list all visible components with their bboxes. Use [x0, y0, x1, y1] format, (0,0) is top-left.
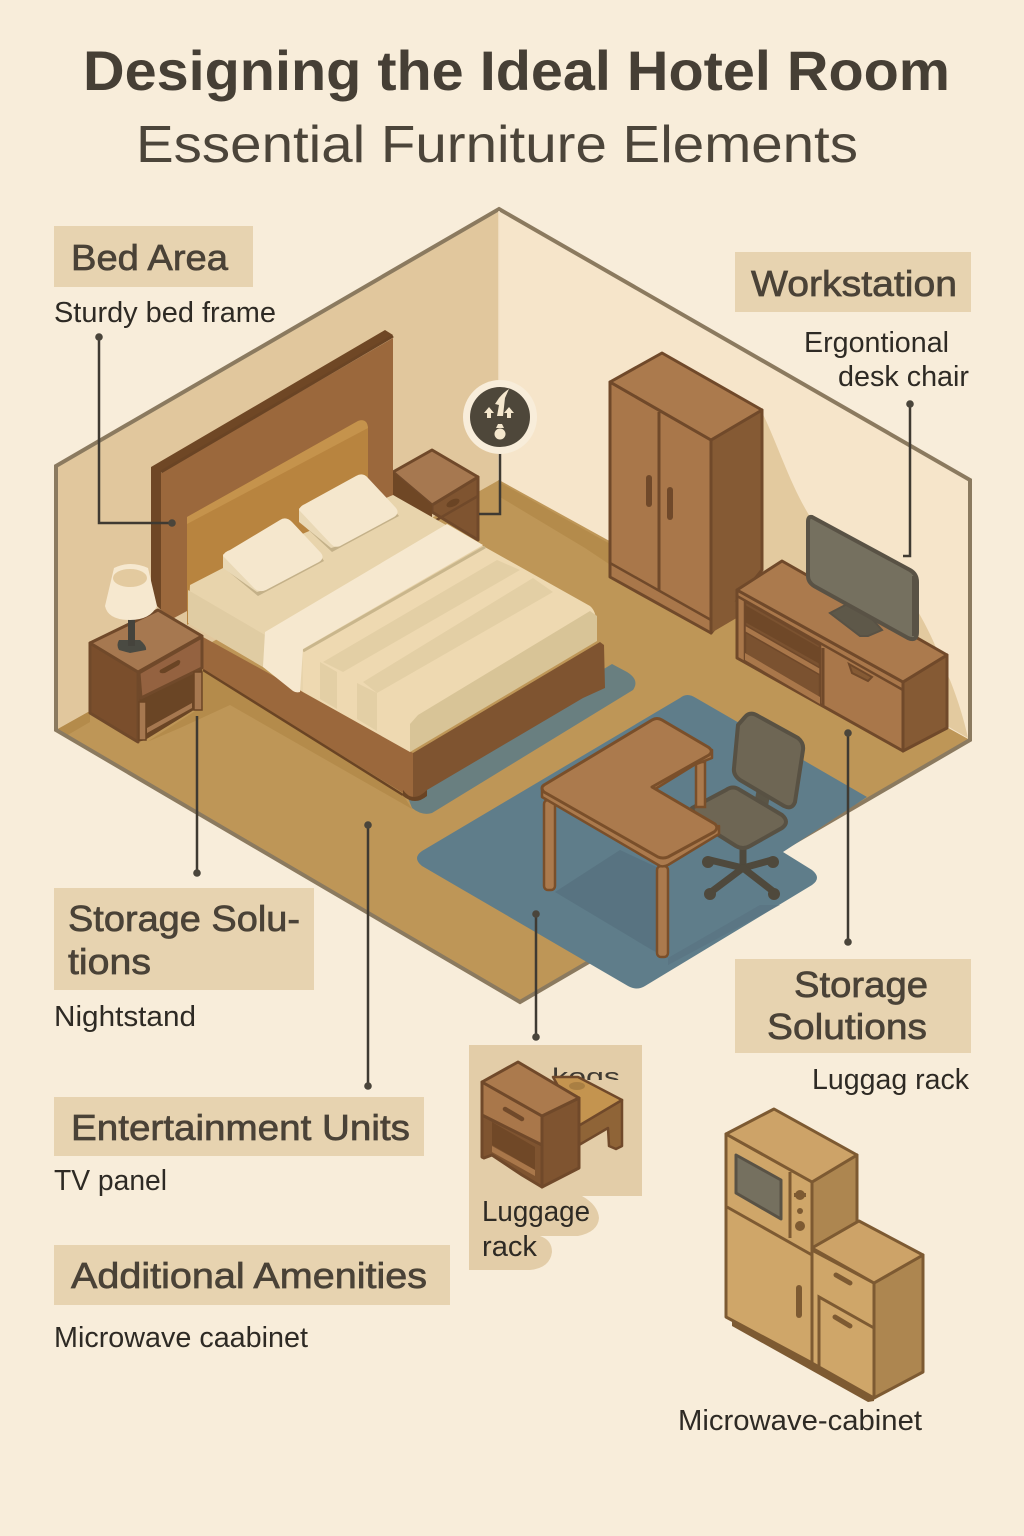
- panel: luggage rack: [469, 1045, 642, 1270]
- label: Entertainment Units: Entertainment Units: [71, 1107, 410, 1148]
- bed frame: [203, 637, 413, 800]
- label: Storage Solutions left: tions: [68, 941, 151, 982]
- callout: nightstand: [193, 716, 201, 877]
- front: [726, 1134, 812, 1363]
- title: Designing the Ideal Hotel Room: [83, 39, 950, 102]
- label: Additional Amenities: [54, 1245, 450, 1354]
- label: Storage Solutions right: Luggag rack: [812, 1064, 969, 1096]
- chair: [692, 714, 803, 900]
- label: Workstation: Ergontional: [804, 327, 949, 359]
- rug: under bed: [405, 664, 635, 814]
- pillow: right: [299, 474, 399, 552]
- label: Bed Area: Bed Area: [71, 237, 229, 278]
- callout: TV panel: [364, 821, 372, 1090]
- label: Storage Solutions right: Solutions: [767, 1006, 927, 1047]
- label: Workstation: Workstation: [751, 263, 957, 304]
- nightstand with lamp: [90, 564, 202, 742]
- headboard cushion: [187, 420, 368, 625]
- duvet stripes: [320, 560, 553, 731]
- label: Workstation: [735, 252, 971, 393]
- callout: storage solutions: [844, 729, 852, 946]
- title: Essential Furniture Elements: [136, 116, 858, 174]
- callout: bed frame: [95, 333, 176, 527]
- top: [726, 1109, 857, 1182]
- wardrobe: [610, 353, 762, 633]
- right wall: [499, 209, 970, 742]
- TV: [808, 517, 917, 639]
- duvet: [303, 546, 596, 752]
- rug: desk area: [417, 695, 867, 988]
- wall corner: [498, 211, 500, 480]
- garbled caption: kogs: [552, 1064, 620, 1091]
- label: Bed Area: Sturdy bed frame: [54, 297, 276, 329]
- lower side: [874, 1255, 923, 1398]
- label: Entertainment Units: [54, 1097, 424, 1197]
- panel: isometric hotel room: [56, 209, 970, 1002]
- room outline: [56, 209, 970, 1002]
- microwave cabinet: [726, 1109, 923, 1402]
- panel: luggage rack: Luggage: [482, 1196, 590, 1228]
- lower top: [812, 1221, 923, 1283]
- label: Storage Solutions right: Storage: [794, 964, 928, 1005]
- floor: [56, 480, 970, 1002]
- label: Workstation: desk chair: [838, 361, 969, 393]
- panel: luggage rack: rack: [482, 1231, 537, 1263]
- wall shadow: [762, 412, 968, 738]
- label: Entertainment Units: TV panel: [54, 1165, 167, 1197]
- label: Storage Solutions left: Storage Solu-: [68, 898, 300, 939]
- door handles: [799, 1275, 850, 1326]
- callout: luggage rack: [532, 910, 540, 1041]
- label: Additional Amenities: Additional Amenities: [71, 1255, 427, 1296]
- desk: [542, 718, 780, 965]
- back nightstand: [393, 450, 478, 540]
- desk shadow: [555, 850, 668, 958]
- title: [83, 39, 950, 174]
- blanket band: [263, 524, 483, 692]
- left wall: [56, 209, 499, 730]
- lamp: [105, 564, 157, 653]
- bed: [188, 474, 605, 801]
- panel background: [469, 1045, 642, 1270]
- label: Bed Area: [54, 226, 276, 329]
- headboard: [151, 330, 393, 625]
- caption: microwave cabinet: Microwave-cabinet: [678, 1405, 922, 1437]
- label: Storage Solutions left: [54, 888, 314, 1033]
- lower front: [812, 1250, 874, 1398]
- label: Storage Solutions right: [735, 959, 971, 1096]
- upper side: [812, 1155, 857, 1248]
- mattress sheet: [188, 495, 483, 692]
- callout: desk chair: [903, 400, 914, 556]
- TV unit: [737, 561, 947, 751]
- microwave details: [727, 1155, 812, 1255]
- label: Additional Amenities: Microwave caabinet: [54, 1322, 308, 1354]
- floor shadows: [56, 482, 612, 809]
- icon: circular room marker: [463, 380, 537, 514]
- callout lines: [95, 333, 914, 1090]
- luggage rack icon: [553, 1077, 622, 1149]
- label: Storage Solutions left: Nightstand: [54, 1001, 196, 1033]
- pillow: left: [223, 518, 324, 596]
- cabinet base: [732, 1318, 874, 1402]
- nightstand icon: [482, 1062, 579, 1187]
